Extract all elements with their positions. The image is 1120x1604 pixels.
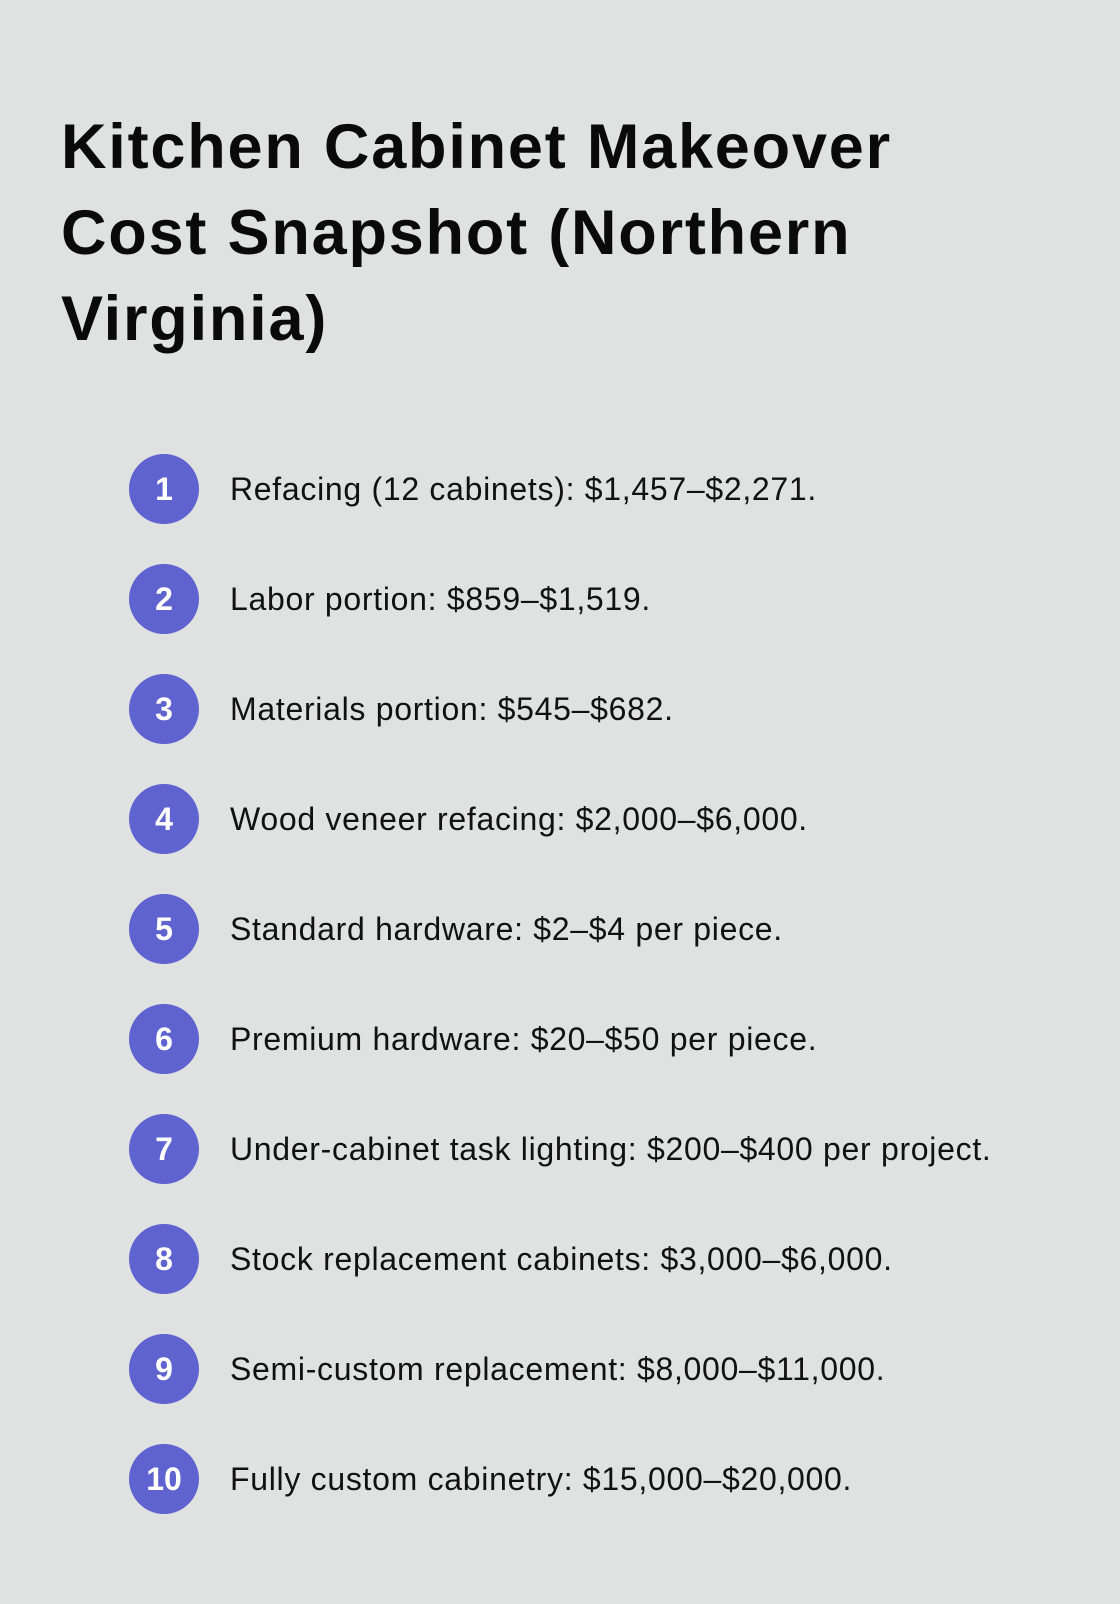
item 2: Labor portion: $859–$1,519. [230,581,651,617]
item 7: 7 [155,1131,173,1167]
item 6 [129,1004,817,1074]
item 9 [129,1334,885,1404]
item 5 [129,894,783,964]
item 8: Stock replacement cabinets: $3,000–$6,000. [230,1241,893,1277]
item 4: 4 [155,801,173,837]
item 7: Under-cabinet task lighting: $200–$400 per project. [230,1131,992,1167]
numbered list [129,454,992,1514]
item 5: Standard hardware: $2–$4 per piece. [230,911,783,947]
item 3: Materials portion: $545–$682. [230,691,674,727]
item 9: Semi-custom replacement: $8,000–$11,000. [230,1351,885,1387]
item 10: 10 [146,1461,182,1497]
item 3: 3 [155,691,173,727]
item 8 [129,1224,893,1294]
title: Virginia) [61,284,328,354]
item 3 [129,674,674,744]
item 5: 5 [155,911,173,947]
item 9: 9 [155,1351,173,1387]
item 1: Refacing (12 cabinets): $1,457–$2,271. [230,471,817,507]
item 1 [129,454,817,524]
item 10: Fully custom cabinetry: $15,000–$20,000. [230,1461,852,1497]
item 1: 1 [155,471,173,507]
item 2: 2 [155,581,173,617]
item 2 [129,564,651,634]
title: Cost Snapshot (Northern [61,198,851,268]
item 7 [129,1114,992,1184]
item 4: Wood veneer refacing: $2,000–$6,000. [230,801,808,837]
item 6: Premium hardware: $20–$50 per piece. [230,1021,817,1057]
title [61,112,892,354]
item 10 [129,1444,852,1514]
item 8: 8 [155,1241,173,1277]
item 6: 6 [155,1021,173,1057]
item 4 [129,784,808,854]
title: Kitchen Cabinet Makeover [61,112,892,182]
